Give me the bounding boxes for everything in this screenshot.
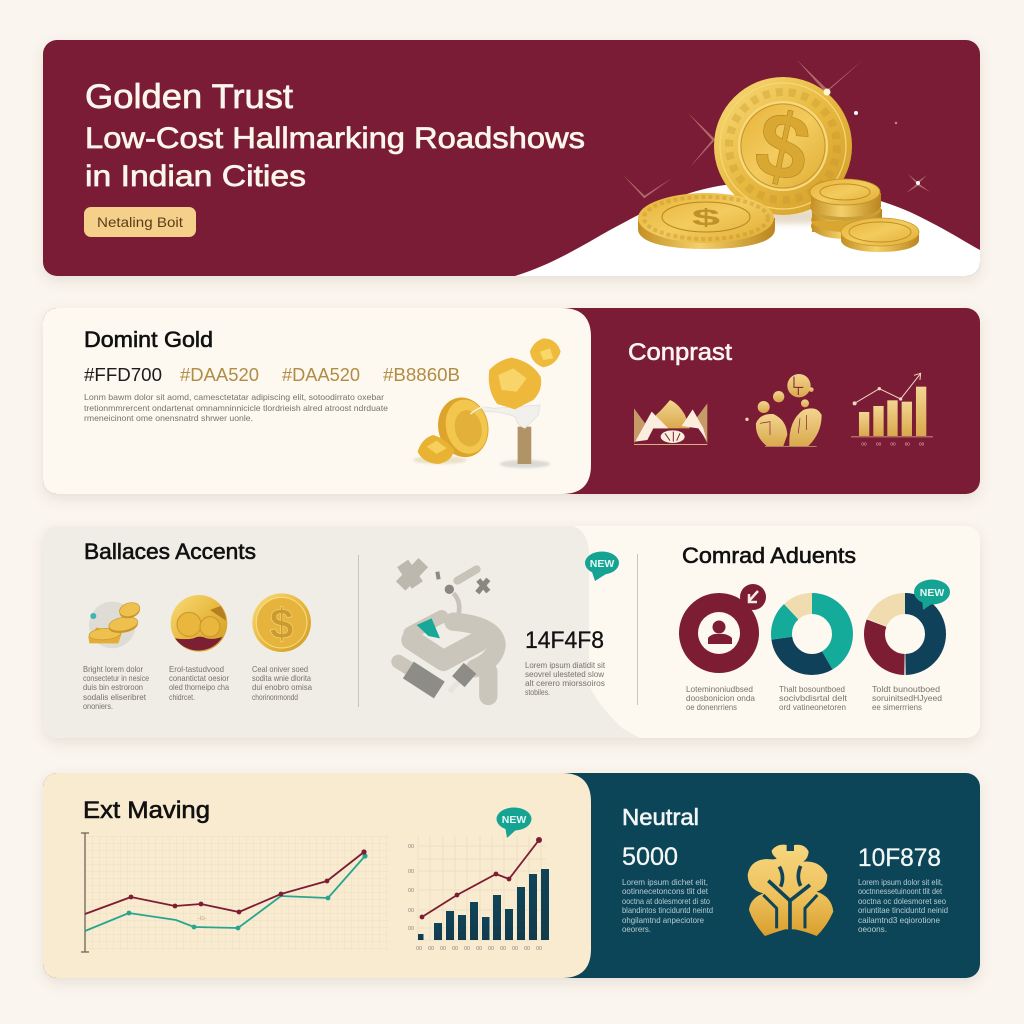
panel: row 3 card — [43, 526, 980, 738]
icon: gold nuggets and hammer — [413, 338, 561, 468]
bar and line chart: 00 — [428, 946, 434, 952]
body text: alt cerero miorssoiros — [525, 678, 605, 688]
icon: sparkle dots — [854, 111, 920, 185]
body text — [858, 877, 948, 934]
panel: exit moving — [43, 773, 591, 978]
caption 1: Loteminoniudbsed — [686, 684, 753, 694]
hero badge: Netaling Boit — [97, 214, 183, 230]
hero title: Low-Cost Hallmarking Roadshows — [85, 122, 585, 155]
body text — [84, 392, 388, 423]
line chart — [81, 833, 389, 952]
body text: ooctna at dolesmoret di sto — [622, 896, 710, 906]
hero title — [85, 78, 585, 193]
caption 2: chidrcet. — [169, 692, 195, 702]
caption 3: chorinonrnondd — [252, 692, 298, 702]
caption 1: duis bin estroroon — [83, 682, 143, 692]
icon: sparkles — [623, 60, 930, 198]
body text: Lorem ipsum diatidit sit — [525, 660, 606, 670]
panel: row 4 card — [43, 773, 980, 978]
callout: NEW: NEW — [590, 558, 614, 570]
icon: bars with trend: 00 — [890, 441, 896, 446]
bar and line chart: 00 — [452, 946, 458, 952]
body text: oeorers. — [622, 924, 651, 934]
body text: tretionmmrercent ondartenat omnamninnicicle tlordrieish alred atroost ndrduate — [84, 403, 388, 413]
callout: NEW: NEW — [920, 587, 944, 599]
caption 2: conantictat oesior — [169, 673, 229, 683]
body text: Lorem ipsum dichet elit, — [622, 877, 708, 887]
icon: coin pile — [88, 601, 141, 648]
donut chart 2 — [874, 604, 936, 664]
icon: bars with trend — [851, 373, 933, 446]
heading: neutral: Neutral — [622, 804, 699, 830]
caption 2: socivbdisrtal delt — [779, 693, 848, 703]
caption 2: Thalt bosountboed — [779, 684, 845, 694]
bar and line chart: 00 — [476, 946, 482, 952]
hex codes: #DAA520 — [180, 365, 259, 385]
icon: bars with trend: 00 — [876, 441, 882, 446]
value: 5000: 5000 — [622, 843, 678, 871]
body text: rmeneicinont ome onensnatrd shrwer uonle. — [84, 413, 253, 423]
icon: person badge — [679, 584, 766, 673]
bar and line chart: 00 — [416, 946, 422, 952]
hex codes: #DAA520 — [282, 365, 360, 385]
body text: oriuntitae tinciduntd neinid — [858, 905, 948, 915]
bar and line chart: 00 — [440, 946, 446, 952]
bar and line chart: 00 — [536, 946, 542, 952]
icon: nuggets — [745, 374, 822, 447]
icon: bars with trend: 00 — [905, 441, 910, 446]
caption 3: Toldt bunoutboed — [872, 684, 940, 694]
panel: contrast — [628, 339, 933, 447]
icon: flat gold coin — [638, 193, 775, 249]
bar and line chart: 00 — [500, 946, 506, 952]
body text: seovrel ulesteted slow — [525, 669, 605, 679]
callout: NEW — [496, 808, 532, 838]
body text: ootinnecetoncons tlit det — [622, 886, 709, 896]
heading: comrad accents: Comrad Aduents — [682, 543, 856, 568]
icon: large gold coin — [714, 77, 852, 224]
icon: large gold coin: $ — [747, 92, 818, 202]
value: 14F4F8: 14F4F8 — [525, 627, 604, 654]
body text — [622, 877, 713, 934]
panel: comrad accents — [679, 543, 950, 712]
hex codes: #B8860B — [383, 365, 460, 385]
panel: dominant gold — [43, 308, 591, 494]
hex codes — [84, 365, 460, 385]
icon: gold medallion — [171, 595, 227, 652]
bar and line chart: 00 — [408, 869, 414, 875]
callout: NEW: NEW — [502, 814, 526, 826]
white wave — [515, 183, 980, 276]
line chart: -lo- — [198, 916, 207, 922]
hero badge — [84, 207, 196, 237]
bar and line chart: 00 — [408, 888, 414, 894]
caption 3: sodita wnie dlorita — [252, 673, 311, 683]
caption 1: Bright lorem dolor — [83, 664, 143, 674]
body text — [525, 660, 606, 697]
body text: Lorem ipsum dolor sit elit, — [858, 877, 943, 887]
body text: ooctnnessetuinoont tlit det — [858, 886, 943, 896]
caption 1: doosbonicion onda — [686, 693, 755, 703]
bar and line chart: 00 — [464, 946, 470, 952]
icon: small front coin — [841, 218, 919, 252]
heading: balanced accents: Ballaces Accents — [84, 539, 256, 564]
caption 2: oled thorneipo cha — [169, 682, 229, 692]
caption 2 — [779, 684, 848, 712]
heading: contrast: Conprast — [628, 339, 732, 366]
caption 1: consectetur in nesice — [83, 673, 149, 683]
caption 3: soruinitsedHJyeed — [872, 693, 942, 703]
body text: cailamtnd3 eqiorotione — [858, 915, 940, 925]
icon: dollar coin: $ — [270, 600, 294, 648]
body text: ohgilamtnd anpeciotore — [622, 915, 704, 925]
bar and line chart: 00 — [408, 908, 414, 914]
panel: row 2 card — [43, 308, 980, 494]
caption 2: Erol-tastudvood — [169, 664, 224, 674]
hero title: Golden Trust — [85, 78, 294, 116]
bar and line chart — [408, 836, 549, 952]
icon: mountains — [634, 400, 707, 445]
callout: NEW — [585, 552, 619, 581]
bar and line chart: 00 — [524, 946, 530, 952]
caption 1 — [83, 664, 149, 711]
icon: dollar coin — [252, 593, 311, 652]
icon: bars with trend: 00 — [861, 441, 867, 446]
heading: dominant gold: Domint Gold — [84, 327, 213, 352]
icon: grey tools illustration — [398, 563, 497, 696]
body text: ooctna oc dolesmoret seo — [858, 896, 946, 906]
donut chart 1 — [782, 604, 842, 664]
caption 1 — [686, 684, 755, 712]
caption 3: ee simerrriens — [872, 702, 922, 712]
icon: golden brain tree — [748, 845, 833, 936]
caption 2: ord vatineonetoren — [779, 702, 846, 712]
caption 1: oe donenrriens — [686, 702, 737, 712]
icon: flat gold coin: $ — [692, 205, 720, 231]
caption 3: dui enobro omisa — [252, 682, 312, 692]
caption 1: sodalis eliseribret — [83, 692, 147, 702]
heading: exit moving: Ext Maving — [83, 797, 210, 824]
panel: balanced accents — [43, 526, 640, 738]
panel: hero banner — [43, 40, 980, 276]
panel: neutral — [622, 804, 948, 936]
value: 10F878: 10F878 — [858, 844, 941, 872]
icon: bars with trend: 00 — [919, 441, 925, 446]
callout: NEW — [914, 580, 950, 610]
caption 3 — [872, 684, 942, 712]
caption 3: Ceal oniver soed — [252, 664, 308, 674]
body text: Lonm bawm dolor sit aomd, camesctetatar adipiscing elit, sotoodirrato oxebar — [84, 392, 384, 402]
body text: stobiles. — [525, 687, 550, 697]
bar and line chart: 00 — [512, 946, 518, 952]
caption 1: ononiers. — [83, 701, 113, 711]
body text: blandintos tinciduntd neintd — [622, 905, 713, 915]
icon: coin stack — [810, 179, 882, 239]
body text: oeoons. — [858, 924, 887, 934]
hero title: in Indian Cities — [85, 160, 306, 193]
bar and line chart: 00 — [488, 946, 494, 952]
caption 3 — [252, 664, 312, 702]
bar and line chart: 00 — [408, 844, 414, 850]
bar and line chart: 00 — [408, 926, 414, 932]
hex codes: #FFD700 — [84, 365, 162, 385]
caption 2 — [169, 664, 229, 702]
